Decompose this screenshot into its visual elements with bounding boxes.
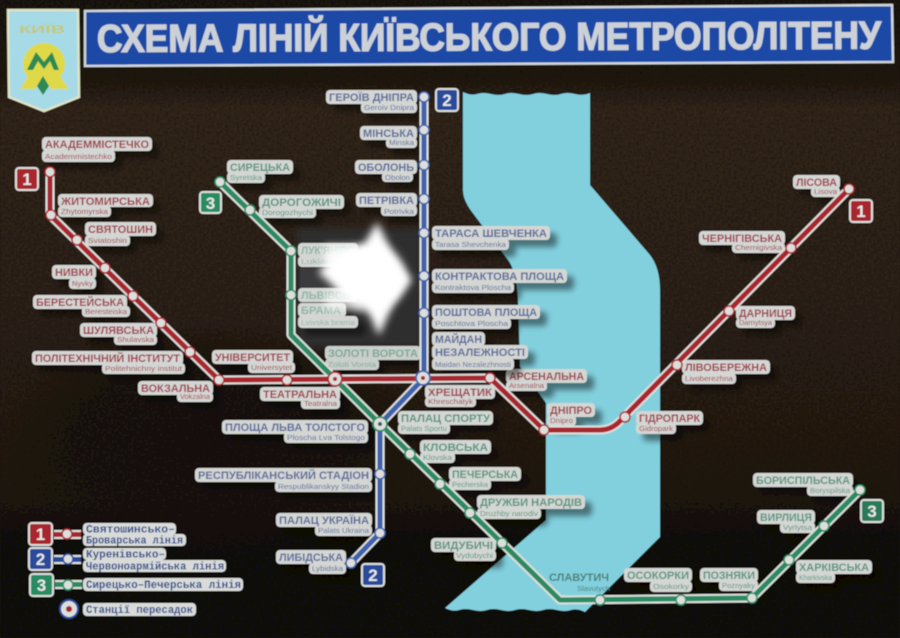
legend: line 1: 1 (36, 525, 45, 544)
Поштова площа: ПОШТОВА ПЛОЩА (435, 307, 537, 319)
Печерська: ПЕЧЕРСЬКА (452, 469, 518, 481)
Славутич: СЛАВУТИЧ (549, 572, 609, 584)
Героїв Дніпра (326, 90, 417, 113)
legend: interchange stations (60, 600, 196, 618)
Чернігівська: ЧЕРНІГІВСЬКА (702, 233, 782, 245)
Вокзальна: Vokzalna (180, 392, 211, 401)
Арсенальна: Arsenalna (509, 381, 545, 390)
Площа Льва Толстого: ПЛОЩА ЛЬВА ТОЛСТОГО (225, 422, 365, 434)
legend: line 2: Куренівсько– (86, 550, 165, 562)
legend: line 1 (29, 523, 186, 548)
station labels: line 3 (227, 160, 872, 593)
Лівобережна: Livoberezhna (685, 374, 734, 383)
Університет (212, 350, 295, 373)
Харківська (796, 560, 872, 583)
Поштова площа: Poschtova Ploscha (435, 319, 509, 328)
Хрещатик (425, 385, 495, 407)
Кловська: КЛОВСЬКА (423, 442, 488, 454)
Житомирська: ЖИТОМИРСЬКА (60, 196, 150, 208)
Дніпро: ДНІПРО (550, 405, 592, 417)
Дружби народів: ДРУЖБИ НАРОДІВ (480, 497, 582, 509)
legend: line 3: 3 (37, 576, 46, 595)
legend: interchange stations: Станції пересадок (86, 605, 193, 617)
Шулявська: ШУЛЯВСЬКА (83, 325, 154, 337)
Політехнічний інститут (32, 351, 185, 374)
Мінська: МІНСЬКА (363, 128, 414, 140)
Славутич (549, 572, 610, 593)
Університет: УНІВЕРСИТЕТ (215, 352, 290, 364)
station labels: line 1 (32, 137, 840, 434)
Вокзальна: ВОКЗАЛЬНА (141, 383, 210, 395)
legend: line 3: Сирецько–Печерська лінія (86, 580, 241, 592)
Лівобережна: ЛІВОБЕРЕЖНА (685, 362, 767, 374)
Видубичі: ВИДУБИЧІ (434, 540, 493, 552)
Академмістечко: Academmistechko (45, 152, 112, 161)
Республіканський стадіон: Respublikanskyy Stadion (278, 482, 369, 491)
Театральна: ТЕАТРАЛЬНА (263, 389, 337, 401)
Політехнічний інститут: ПОЛІТЕХНІЧНИЙ ІНСТИТУТ (35, 352, 180, 365)
Петрівка: Potrivka (384, 207, 415, 216)
interchange stations (328, 371, 430, 431)
line number badges: 2 (442, 91, 452, 110)
Дорогожичі (259, 195, 344, 218)
Славутич: Slavutych (577, 584, 610, 593)
line number badges: 1 (22, 170, 32, 189)
Львівська брама: БРАМА (301, 305, 341, 317)
Дніпро (547, 403, 595, 426)
glare reflection (300, 222, 412, 336)
Майдан Незалежності (432, 332, 528, 370)
Святошин: Sviatoshin (88, 236, 127, 245)
Нивки (52, 265, 96, 289)
Либідська: Lybidska (312, 564, 344, 573)
Площа Льва Толстого (222, 420, 368, 443)
Героїв Дніпра: Geroiv Dnipra (364, 103, 415, 112)
Університет: Universytet (251, 363, 293, 372)
Видубичі (431, 538, 496, 561)
Лівобережна (682, 360, 770, 384)
legend (29, 523, 243, 618)
line number badges (16, 89, 883, 586)
Палац Україна: ПАЛАЦ УКРАЇНА (279, 514, 369, 527)
Лук'янівська: ЛУК'ЯНІВСЬКА (301, 245, 375, 257)
Вирлиця: ВИРЛИЦЯ (760, 512, 812, 524)
Вирлиця: Vyrlytsa (783, 523, 813, 532)
Дорогожичі: Dorogozhychi (262, 208, 313, 217)
Лісова (793, 175, 840, 197)
Святошин: СВЯТОШИН (88, 224, 153, 236)
Шулявська (80, 323, 157, 345)
Гідропарк: Gidropark (639, 424, 673, 433)
Тараса Шевченка: Tarasa Shevchenka (435, 240, 507, 249)
Оболонь: ОБОЛОНЬ (358, 162, 414, 174)
Львівська брама (298, 288, 365, 328)
Бориспільська: Boryspilska (810, 486, 851, 495)
Майдан Незалежності: НЕЗАЛЕЖНОСТІ (435, 347, 525, 359)
emblem: Kyiv metro shield (8, 10, 79, 111)
Дарниця: Darnytsya (739, 318, 773, 327)
Хрещатик: Khreschatyk (428, 397, 473, 406)
Гідропарк: ГІДРОПАРК (639, 413, 700, 425)
station labels: line 2 (195, 90, 567, 574)
Дружби народів (477, 495, 585, 519)
Львівська брама: ЛЬВІВСЬКА (301, 290, 365, 302)
Майдан Незалежності: МАЙДАН (435, 333, 482, 346)
Палац Україна: Palats Ukraina (318, 526, 370, 535)
Золоті ворота: Zoloti Vorota (328, 360, 377, 369)
Академмістечко (42, 137, 152, 162)
Позняки (700, 568, 758, 591)
Сирецька: Syretska (230, 173, 263, 182)
Сирецька: СИРЕЦЬКА (230, 162, 290, 174)
Дніпро: Dnipro (550, 416, 573, 425)
legend: line 2 (29, 548, 226, 574)
legend: line 1: Святошинсько– (86, 524, 175, 536)
Осокорки (624, 568, 692, 592)
Мінська: Minska (389, 138, 415, 147)
Осокорки: Osokorky (653, 582, 689, 591)
Лісова: Lisova (814, 187, 838, 196)
Дарниця: ДАРНИЦЯ (739, 308, 792, 320)
Берестейська: Beresteiska (85, 307, 128, 316)
Либідська (276, 550, 346, 574)
Палац Україна (276, 513, 372, 536)
legend: line 1: Броварська лінія (86, 536, 183, 548)
Контрактова площа: Kontraktova Ploscha (435, 283, 512, 292)
Печерська (449, 467, 521, 490)
Дарниця (736, 306, 795, 328)
Чернігівська (699, 231, 785, 253)
Берестейська (33, 295, 130, 317)
Театральна (260, 387, 340, 409)
line number badges: 2 (368, 566, 378, 585)
Житомирська (58, 194, 153, 217)
Арсенальна: АРСЕНАЛЬНА (509, 371, 584, 383)
Позняки: ПОЗНЯКИ (703, 570, 755, 582)
legend: line 2: Червоноармійська лінія (86, 562, 224, 574)
Тараса Шевченка: ТАРАСА ШЕВЧЕНКА (435, 228, 547, 240)
stations: line 2 (346, 92, 429, 568)
river Dnipro (445, 92, 660, 612)
Шулявська: Shulavska (117, 335, 155, 344)
Львівська брама: Lvivska brama (301, 318, 356, 327)
Поштова площа (432, 305, 540, 329)
Житомирська: Zhytomyrska (61, 207, 109, 216)
Осокорки: ОСОКОРКИ (627, 570, 689, 582)
Палац спорту: Palats Sportu (401, 424, 447, 433)
line number badges: 3 (867, 502, 877, 521)
Святошин (85, 222, 156, 246)
Майдан Незалежності: Maidan Nezalezhnosti (435, 360, 511, 369)
Республіканський стадіон (195, 468, 372, 492)
Золоті ворота: ЗОЛОТІ ВОРОТА (328, 348, 418, 360)
Лук'янівська (298, 243, 375, 267)
Академмістечко: АКАДЕММІСТЕЧКО (45, 139, 149, 151)
line 1 red (50, 172, 849, 430)
Політехнічний інститут: Politehnichny institut (105, 364, 183, 373)
Лук'янівська: Lukianivska (301, 257, 356, 266)
Золоті ворота (325, 346, 421, 370)
Позняки: Poznyaky (722, 581, 755, 590)
legend: line 2: 2 (36, 550, 45, 569)
Мінська (360, 126, 417, 148)
line number badges: 3 (206, 194, 215, 213)
Тараса Шевченка (432, 226, 550, 250)
Берестейська: БЕРЕСТЕЙСЬКА (36, 296, 124, 309)
Контрактова площа: КОНТРАКТОВА ПЛОЩА (435, 271, 564, 283)
Либідська: ЛИБІДСЬКА (279, 552, 343, 564)
Видубичі: Vydubychi (456, 551, 493, 560)
Харківська: ХАРКІВСЬКА (799, 562, 869, 574)
Палац спорту (398, 411, 493, 434)
Петрівка: ПЕТРІВКА (359, 195, 414, 207)
Дружби народів: Druzhby narodiv (480, 509, 538, 518)
Хрещатик: ХРЕЩАТИК (428, 387, 492, 399)
Кловська (420, 440, 491, 463)
Дорогожичі: ДОРОГОЖИЧІ (262, 197, 341, 209)
Нивки: Nyvky (72, 279, 93, 288)
emblem: Kyiv metro shield: КИЇВ (19, 23, 65, 36)
line 3 green (220, 182, 860, 600)
Палац спорту: ПАЛАЦ СПОРТУ (401, 413, 490, 425)
Героїв Дніпра: ГЕРОЇВ ДНІПРА (329, 91, 414, 104)
Оболонь (355, 160, 417, 182)
Контрактова площа (432, 269, 567, 293)
Сирецька (227, 160, 293, 183)
Оболонь: Obolon (385, 173, 410, 182)
Гідропарк (636, 411, 703, 434)
Вокзальна (138, 381, 213, 402)
Печерська: Pecherska (452, 480, 489, 489)
legend: line 3 (30, 574, 243, 596)
stations: line 3 (215, 177, 865, 605)
Вирлиця (757, 510, 815, 533)
Кловська: Klovska (423, 453, 453, 462)
Лісова: ЛІСОВА (796, 177, 837, 189)
Нивки: НИВКИ (55, 267, 93, 279)
Чернігівська: Chernigivska (735, 243, 783, 252)
Площа Льва Толстого: Ploscha Lva Tolstogo (287, 433, 365, 442)
Харківська: Kharkivska (799, 573, 833, 582)
Бориспільська: БОРИСПІЛЬСЬКА (756, 475, 850, 487)
Бориспільська (753, 473, 853, 496)
stations: line 1 (45, 167, 854, 435)
Театральна: Teatralna (304, 399, 338, 408)
Петрівка (356, 193, 417, 216)
Республіканський стадіон: РЕСПУБЛІКАНСЬКИЙ СТАДІОН (198, 469, 369, 482)
line 2 blue (351, 97, 424, 563)
Арсенальна (506, 369, 587, 391)
line number badges: 1 (856, 202, 866, 221)
